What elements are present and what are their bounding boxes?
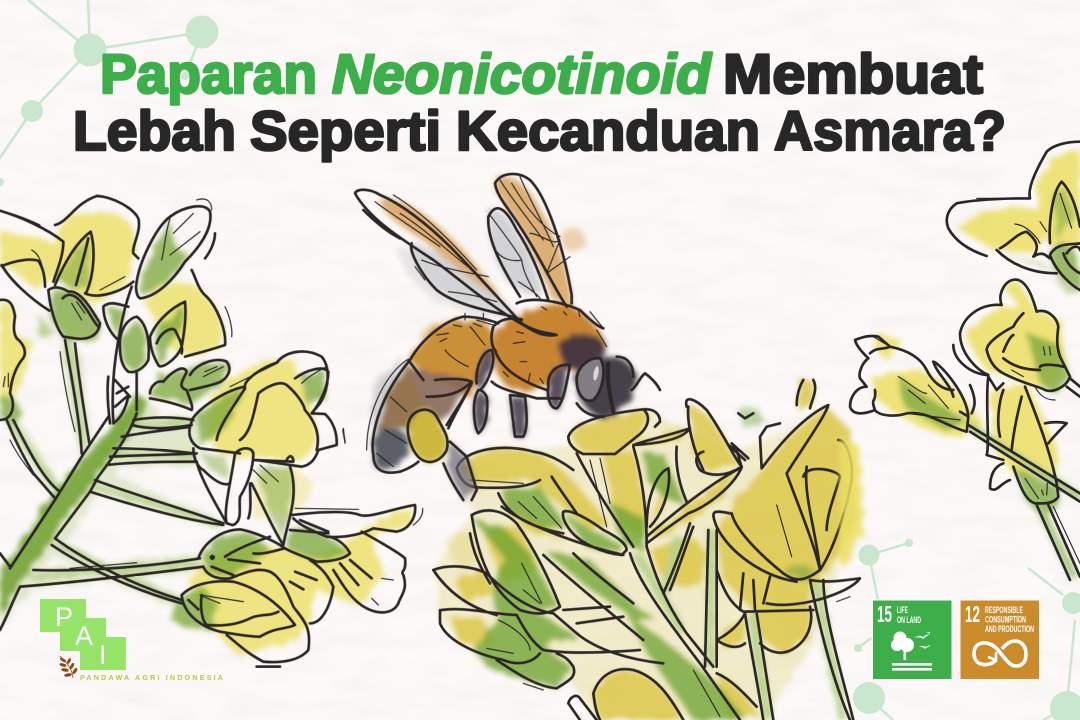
- bee watercolour: [370, 177, 636, 500]
- logo letters: [55, 602, 107, 670]
- bee line art: [343, 174, 660, 500]
- SDG 15 label: LIFE: [897, 605, 908, 616]
- right rapeseed flowers: [840, 142, 1080, 580]
- SDG 15 badge: [872, 600, 952, 680]
- title: [73, 42, 1006, 162]
- title line two: Seperti: [250, 99, 441, 162]
- centre cluster watercolour: [437, 380, 857, 720]
- left branch line art: [0, 196, 423, 667]
- left branch watercolour: [0, 212, 413, 657]
- title line two: Asmara?: [774, 99, 1006, 162]
- icon: tree and birds: [891, 632, 932, 671]
- molecule network: top left: [0, 0, 218, 186]
- logo tagline: PANDAWA AGRI INDONESIA: [80, 673, 223, 682]
- SDG 12 badge: [960, 600, 1040, 680]
- title line two: [73, 99, 1006, 162]
- PAI logo: [40, 599, 223, 682]
- SDG 15 number: 15: [877, 601, 892, 627]
- title line one: Paparan: [100, 42, 317, 105]
- right flowers watercolour: [840, 150, 1080, 577]
- molecule network: bottom right: [853, 539, 1080, 720]
- icon: infinity loop: [974, 641, 1026, 666]
- SDG 15 label: ON LAND: [897, 615, 921, 626]
- centre cluster line art: [433, 380, 860, 720]
- logo letters: P: [55, 602, 73, 632]
- SDG 12 number: 12: [965, 601, 980, 627]
- SDG 12 label: RESPONSIBLE: [985, 605, 1023, 616]
- right flowers line art: [850, 142, 1080, 580]
- SDG 12 label: CONSUMPTION: [985, 614, 1026, 626]
- title line one: [100, 42, 983, 105]
- title line one: Neonicotinoid: [332, 42, 713, 105]
- icon: wheat sprig: [60, 656, 78, 678]
- logo letters: A: [75, 621, 93, 651]
- left rapeseed flower branch: [0, 196, 423, 667]
- title line one: Membuat: [723, 42, 983, 105]
- centre flower cluster: [433, 380, 860, 720]
- SDG 12 label: AND PRODUCTION: [985, 624, 1034, 635]
- bee eye highlight: [592, 366, 600, 381]
- title line two: Lebah: [73, 99, 236, 162]
- logo squares: [40, 599, 126, 670]
- bee eye: [577, 358, 603, 401]
- logo letters: I: [99, 640, 107, 670]
- honey bee: [343, 174, 660, 500]
- SDG 12 label: [985, 605, 1034, 635]
- title line two: Kecanduan: [456, 99, 760, 162]
- SDG 15 label: [897, 605, 921, 626]
